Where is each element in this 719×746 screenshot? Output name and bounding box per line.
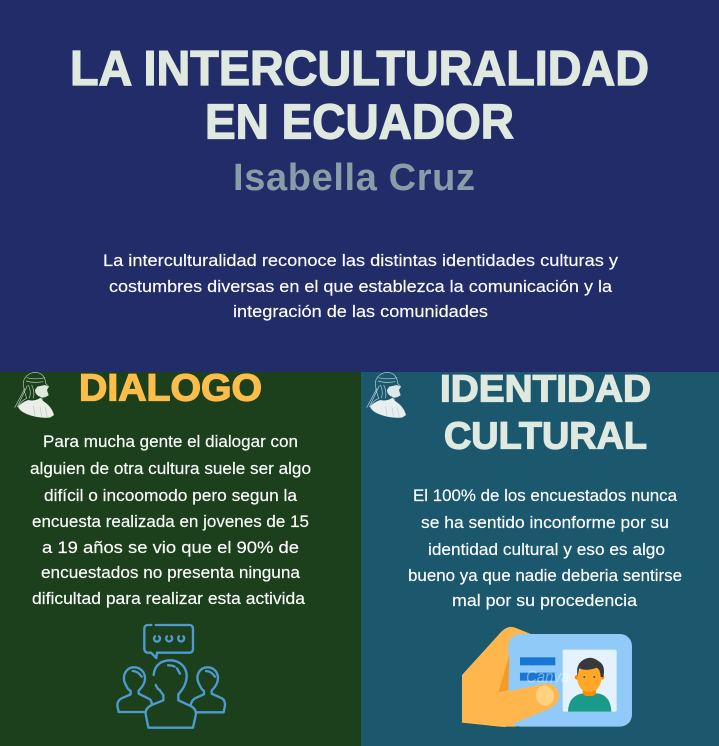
icon: group of people talking — [117, 625, 225, 728]
title: LA INTERCULTURALIDAD — [70, 42, 649, 96]
heading: dialogo: DIALOGO — [79, 368, 262, 410]
text: dialogo: Para mucha gente el dialogar con — [43, 432, 298, 451]
text: dialogo: encuesta realizada en jovenes de 15 — [32, 512, 309, 531]
intro text — [103, 251, 619, 321]
text: identidad cultural: identidad cultural y eso es algo — [428, 540, 665, 559]
heading: identidad cultural — [440, 368, 651, 458]
text: identidad cultural: El 100% de los encuestados nunca — [413, 486, 678, 505]
icon: hand holding id card: Canva — [526, 667, 570, 687]
text: identidad cultural — [408, 486, 682, 610]
intro text: costumbres diversas en el que establezca la comunicación y la — [109, 277, 613, 296]
panel: identidad cultural — [361, 368, 719, 746]
intro text: La interculturalidad reconoce las distintas identidades culturas y — [103, 251, 619, 270]
text: identidad cultural: mal por su procedencia — [452, 591, 638, 610]
text: dialogo — [30, 432, 311, 608]
icon: bust portrait — [15, 372, 54, 418]
heading: identidad cultural: CULTURAL — [444, 416, 647, 458]
heading: identidad cultural: IDENTIDAD — [440, 368, 651, 410]
icon: bust portrait — [367, 372, 406, 418]
text: dialogo: difícil o incoomodo pero segun la — [44, 486, 298, 505]
text: identidad cultural: se ha sentido inconforme por su — [421, 513, 669, 532]
title — [70, 42, 649, 150]
text: dialogo: encuestados no presenta ninguna — [41, 563, 301, 582]
title: EN ECUADOR — [205, 96, 514, 150]
panel: header — [0, 0, 719, 372]
icon: hand holding id card — [462, 627, 632, 727]
text: identidad cultural: bueno ya que nadie deberia sentirse — [408, 566, 682, 585]
text: dialogo: dificultad para realizar esta activida — [32, 589, 306, 608]
author name: Isabella Cruz — [233, 157, 475, 199]
text: dialogo: alguien de otra cultura suele ser algo — [30, 459, 311, 478]
text: dialogo: a 19 años se vio que el 90% de — [42, 538, 299, 557]
panel: dialogo — [0, 368, 361, 746]
intro text: integración de las comunidades — [233, 302, 488, 321]
